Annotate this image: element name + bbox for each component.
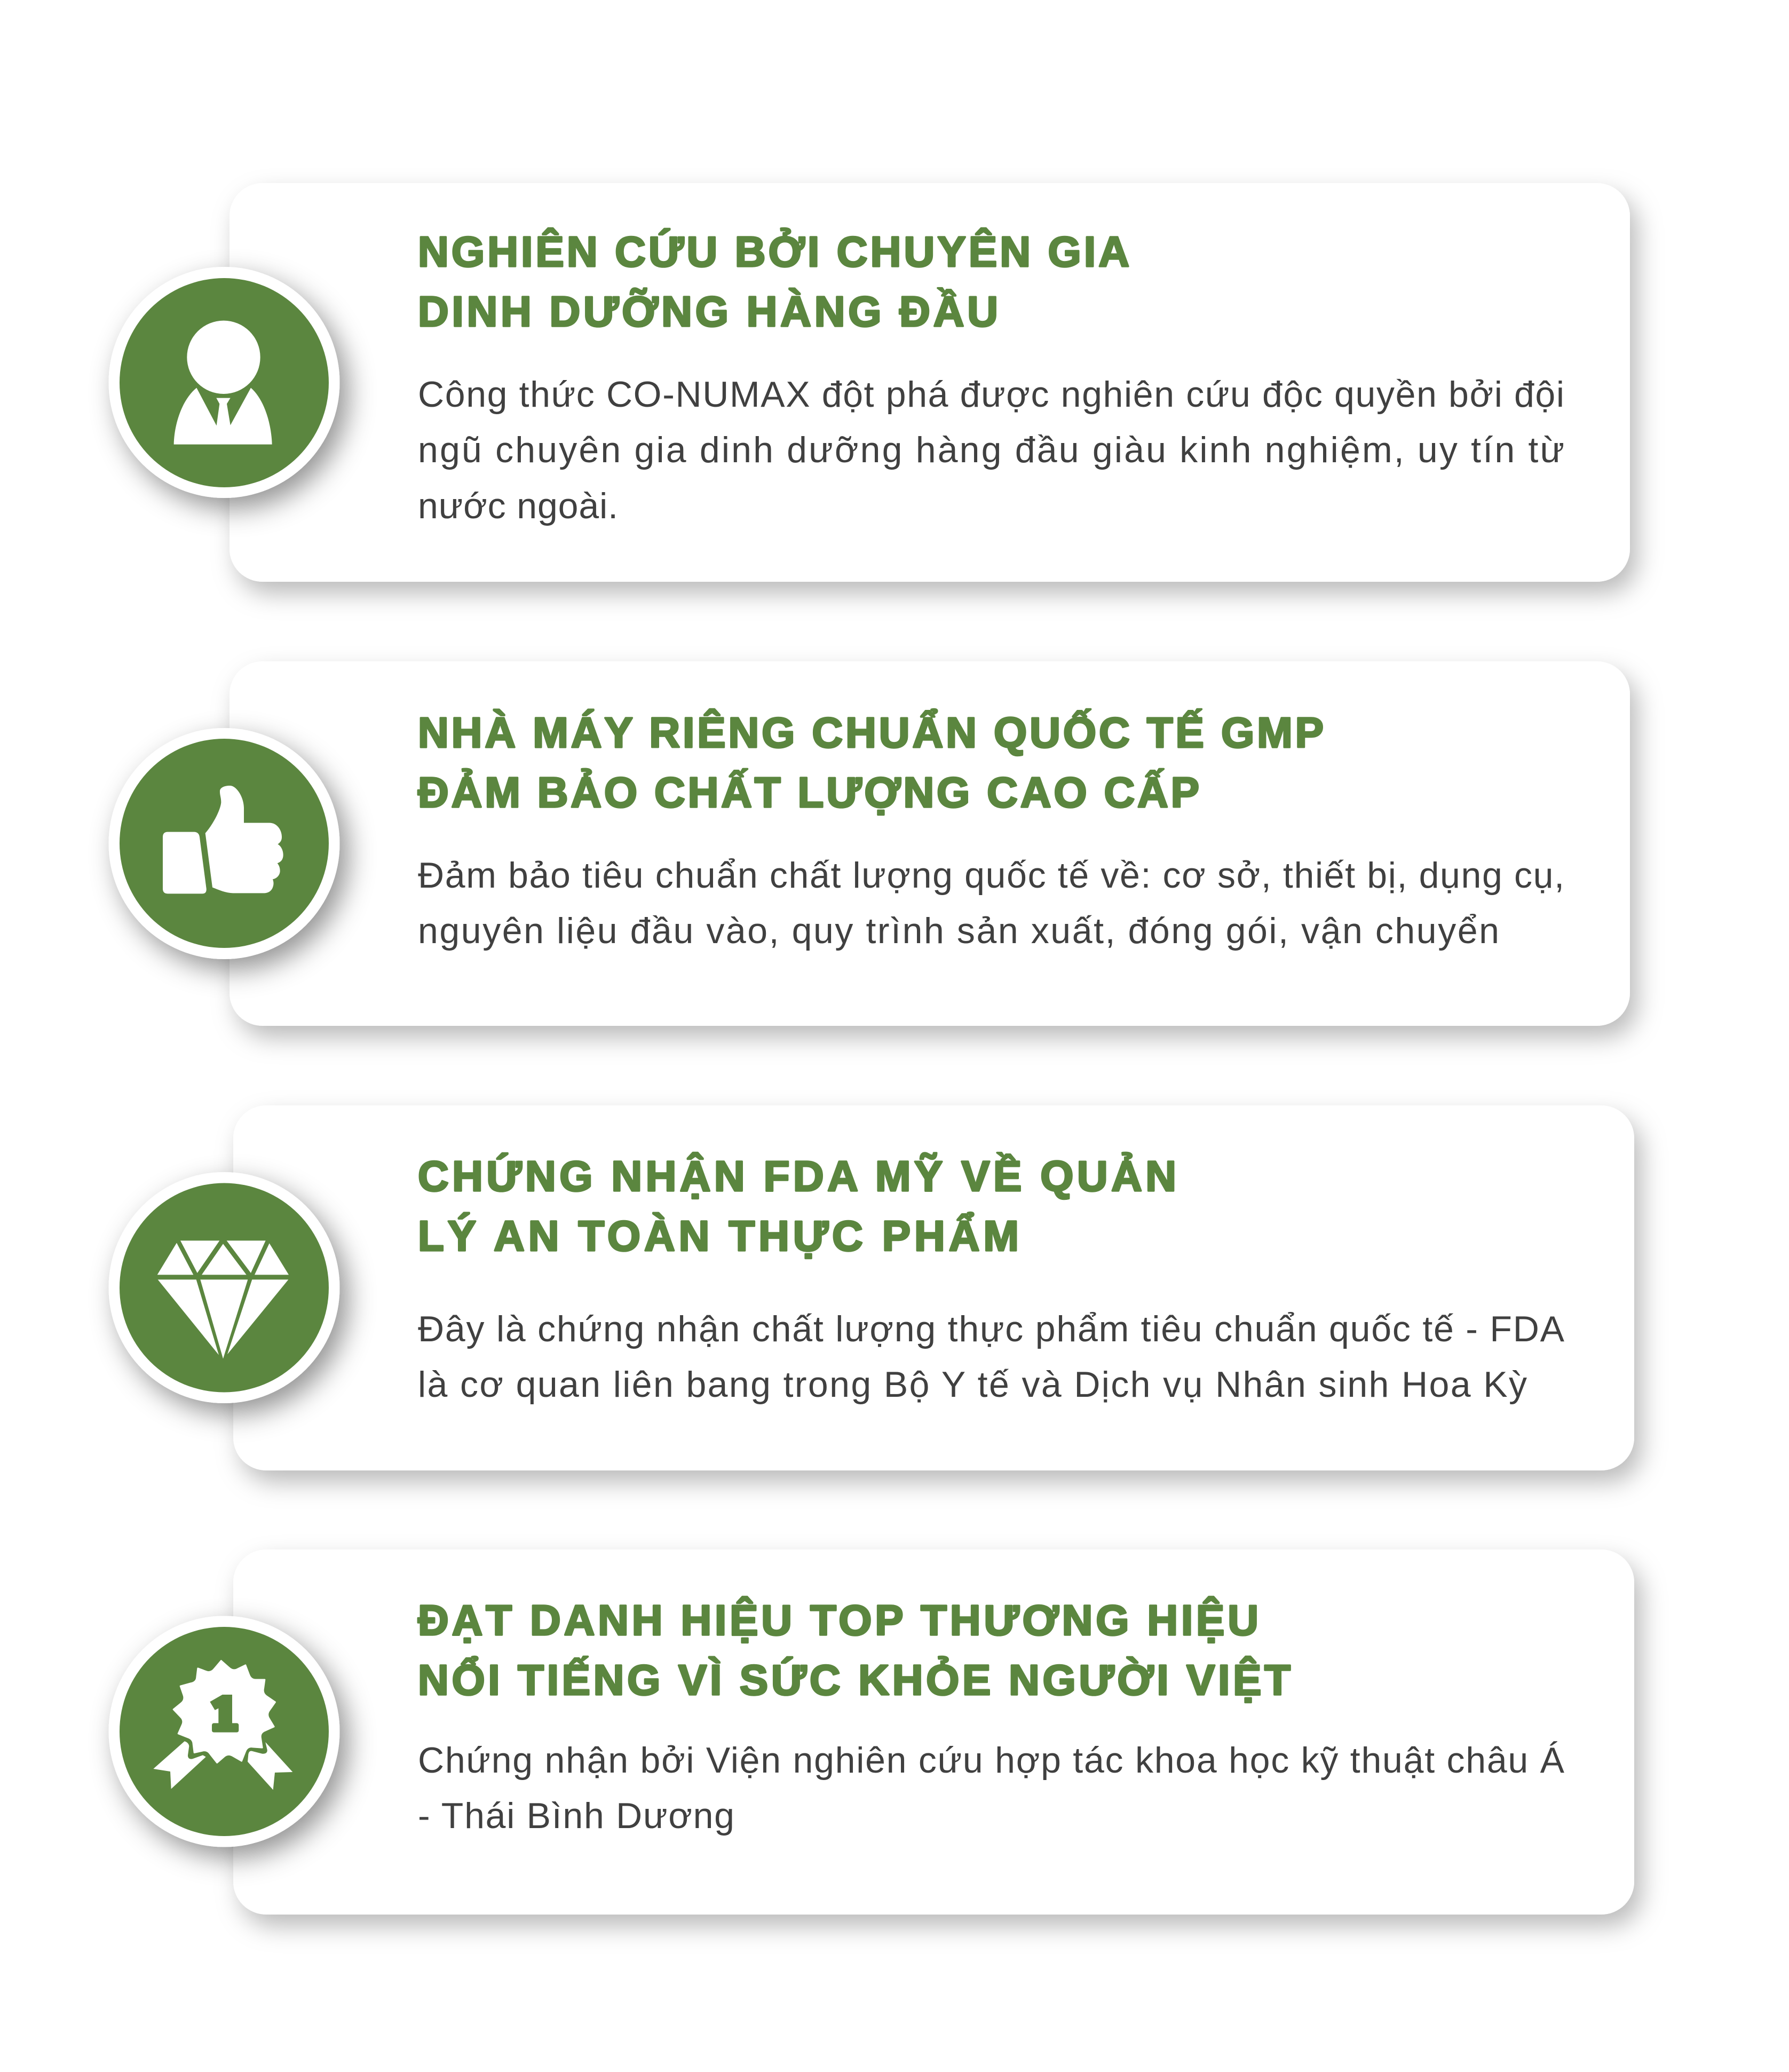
card background [229,661,1630,1026]
panel: nghiên cứu bởi chuyên gia [109,183,1630,582]
body text [418,1309,1565,1405]
icon: number one rosette [109,1616,339,1847]
body text: Chứng nhận bởi Viện nghiên cứu hợp tác khoa học kỹ thuật châu Á [418,1740,1565,1781]
panel: chứng nhận FDA [109,1105,1634,1470]
heading: DINH DƯỠNG HÀNG ĐẦU [418,288,998,335]
panel: nhà máy riêng chuẩn GMP [109,661,1630,1026]
icon: diamond [109,1172,339,1403]
icon: expert in a suit [109,267,339,498]
heading [418,228,1129,335]
body text: nước ngoài. [418,486,618,526]
body text: Đây là chứng nhận chất lượng thực phẩm tiêu chuẩn quốc tế - FDA [418,1309,1565,1349]
body text: ngũ chuyên gia dinh dưỡng hàng đầu giàu kinh nghiệm, uy tín từ [418,430,1564,470]
body text [418,1740,1565,1836]
body text [418,855,1564,951]
card background [233,1549,1634,1915]
body text: Công thức CO-NUMAX đột phá được nghiên cứu độc quyền bởi đội [418,374,1564,415]
heading: NGHIÊN CỨU BỞI CHUYÊN GIA [418,228,1129,275]
heading [418,1596,1291,1704]
body text: Đảm bảo tiêu chuẩn chất lượng quốc tế về: cơ sở, thiết bị, dụng cụ, [418,855,1564,896]
heading [418,709,1324,816]
heading: ĐẠT DANH HIỆU TOP THƯƠNG HIỆU [418,1596,1258,1644]
heading [418,1152,1176,1260]
heading: NỔI TIẾNG VÌ SỨC KHỎE NGƯỜI VIỆT [418,1656,1291,1704]
body text: - Thái Bình Dương [418,1796,734,1836]
body text: là cơ quan liên bang trong Bộ Y tế và Dịch vụ Nhân sinh Hoa Kỳ [418,1364,1527,1405]
body text [418,374,1564,526]
body text: nguyên liệu đầu vào, quy trình sản xuất, đóng gói, vận chuyển [418,911,1499,951]
icon: thumbs up [109,728,339,959]
heading: LÝ AN TOÀN THỰC PHẨM [418,1212,1019,1260]
heading: NHÀ MÁY RIÊNG CHUẨN QUỐC TẾ GMP [418,709,1324,756]
card background [233,1105,1634,1470]
heading: CHỨNG NHẬN FDA MỸ VỀ QUẢN [418,1152,1176,1200]
card background [229,183,1630,582]
panel: top thương hiệu [109,1549,1634,1915]
heading: ĐẢM BẢO CHẤT LƯỢNG CAO CẤP [418,769,1199,816]
